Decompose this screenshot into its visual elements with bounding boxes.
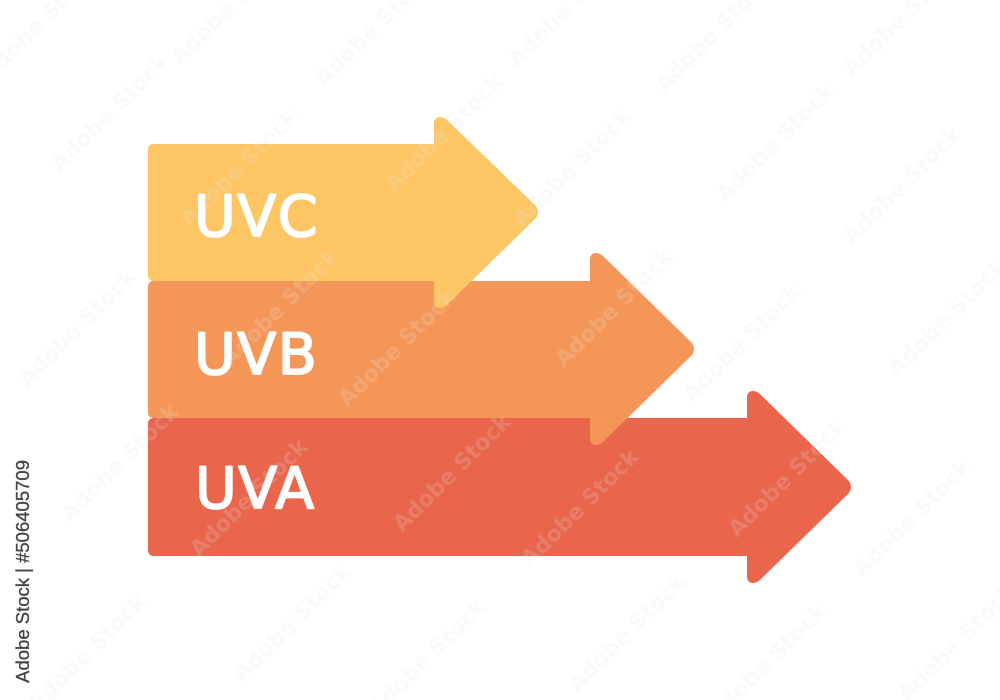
watermark pattern: Adobe Stock: [839, 122, 967, 250]
watermark pattern: Adobe Stock: [217, 244, 345, 372]
watermark pattern: Adobe Stock: [334, 284, 462, 412]
watermark pattern: Adobe Stock: [176, 104, 304, 232]
watermark pattern: Adobe Stock: [57, 399, 185, 527]
side credit text: Adobe Stock | #506405709: [12, 460, 33, 683]
watermark pattern: Adobe Stock: [517, 444, 645, 572]
label: UVB: UVB: [194, 322, 318, 388]
watermark pattern: Adobe Stock: [14, 264, 142, 392]
arrow: UVB: [148, 253, 694, 445]
watermark pattern: Adobe Stock: [724, 414, 852, 542]
watermark pattern: Adobe Stock: [679, 279, 807, 407]
watermark pattern: Adobe Stock: [47, 49, 175, 177]
watermark pattern: Adobe Stock: [712, 79, 840, 207]
arrow: UVA: [148, 391, 851, 583]
label: UVA: UVA: [195, 456, 316, 522]
watermark pattern: Adobe Stock: [551, 244, 679, 372]
watermark pattern: Adobe Stock: [229, 559, 357, 687]
watermark pattern: Adobe Stock: [381, 69, 509, 197]
watermark pattern: Adobe Stock: [564, 569, 692, 697]
watermark pattern: Adobe Stock: [186, 434, 314, 562]
watermark pattern: Adobe Stock: [389, 409, 517, 537]
label: UVC: UVC: [194, 184, 319, 250]
watermark pattern: Adobe Stock: [849, 454, 977, 582]
watermark pattern: Adobe Stock: [509, 104, 637, 232]
arrow: UVC: [148, 117, 538, 308]
